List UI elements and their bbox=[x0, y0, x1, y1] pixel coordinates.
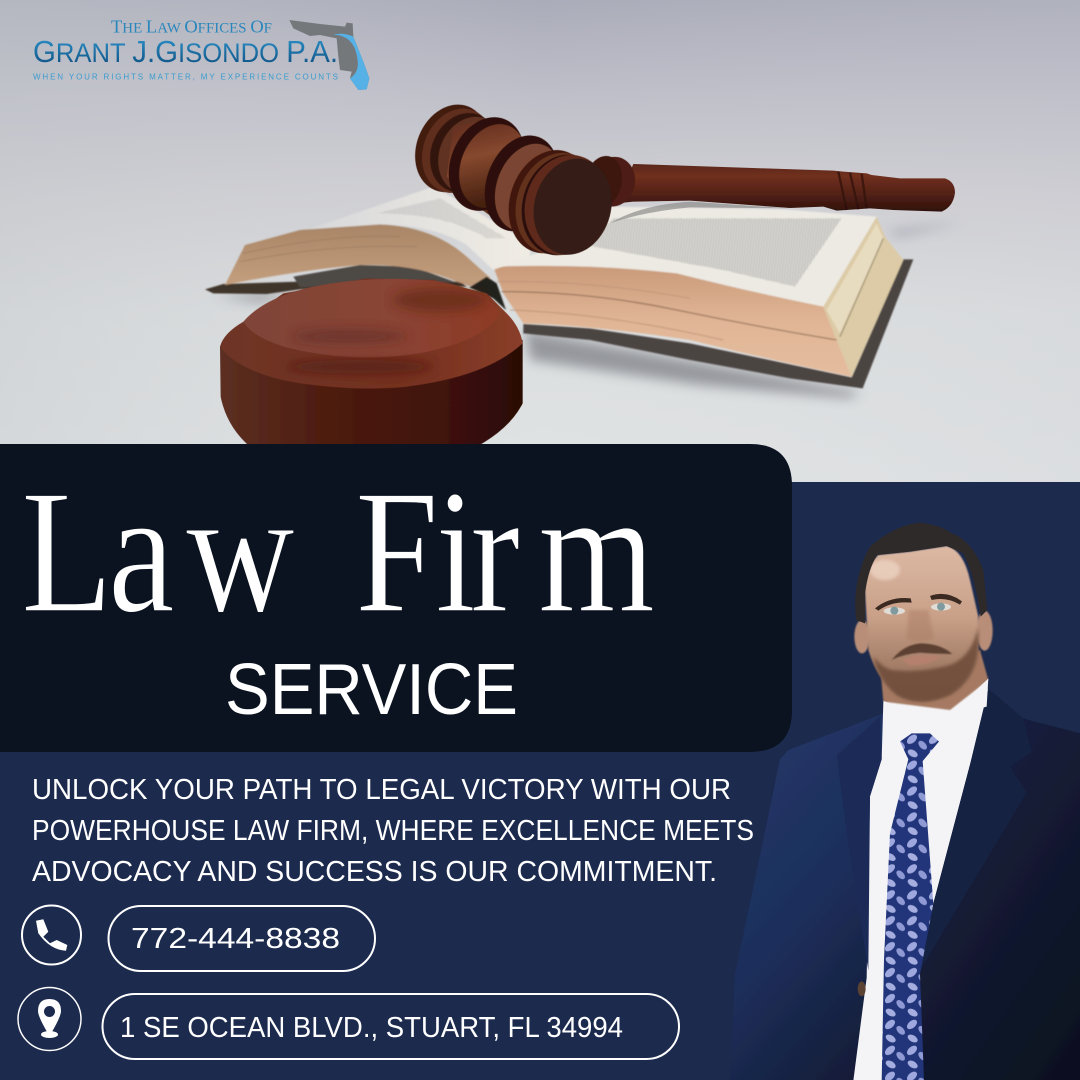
jacket button bbox=[858, 981, 866, 996]
wood mottling bbox=[287, 288, 487, 373]
description line 3: ADVOCACY AND SUCCESS IS OUR COMMITMENT. bbox=[32, 856, 717, 888]
shirt bbox=[853, 681, 989, 1080]
eyes and brows bbox=[875, 594, 962, 615]
left printed text bbox=[377, 198, 507, 238]
gavel face bbox=[523, 150, 622, 264]
description line 1: UNLOCK YOUR PATH TO LEGAL VICTORY WITH OUR bbox=[32, 774, 731, 806]
description line 2: POWERHOUSE LAW FIRM, WHERE EXCELLENCE MEETS bbox=[32, 815, 754, 847]
fore edge bbox=[823, 217, 903, 377]
spine notch bbox=[469, 277, 506, 310]
collar bbox=[587, 153, 640, 211]
book cover bbox=[523, 259, 913, 388]
left lapel bbox=[837, 717, 882, 970]
block top face bbox=[243, 279, 499, 357]
head bbox=[854, 523, 993, 723]
left underside shadow bbox=[293, 265, 457, 287]
panel background bbox=[0, 444, 792, 752]
pill: address: 1 SE OCEAN BLVD., STUART, FL 34994 bbox=[120, 1012, 623, 1044]
sound block bbox=[220, 278, 523, 447]
page surface bbox=[493, 207, 877, 307]
logo: Florida map bbox=[289, 20, 369, 90]
second ring bbox=[472, 125, 571, 242]
face bbox=[865, 546, 978, 702]
lips bbox=[902, 655, 941, 665]
subtitle: SERVICE: SERVICE bbox=[225, 650, 518, 730]
title: Law Firm: Law Firm bbox=[21, 454, 655, 650]
printed text bbox=[540, 218, 842, 287]
gavel head bbox=[402, 93, 640, 265]
pill: phone number: 772-444-8838 bbox=[131, 923, 340, 955]
hair bbox=[855, 523, 987, 623]
block rim bbox=[220, 278, 523, 389]
right jacket front bbox=[918, 689, 1080, 1080]
panel: title bbox=[0, 444, 792, 752]
left cover bbox=[205, 282, 467, 294]
left page surface bbox=[297, 187, 530, 270]
barrel bbox=[447, 118, 550, 230]
icon: phone bbox=[22, 906, 81, 964]
moustache bbox=[892, 643, 952, 660]
logo bbox=[33, 16, 369, 90]
logo: firm name: GRANT J.GISONDO P.A. bbox=[33, 34, 338, 69]
tie bbox=[882, 733, 939, 1080]
right lapel bbox=[920, 689, 1032, 970]
handle shadow on page bbox=[610, 202, 790, 223]
left page block bbox=[225, 224, 491, 286]
forehead highlight bbox=[870, 560, 900, 580]
jacket bbox=[730, 689, 1080, 1080]
suit and shirt bbox=[730, 681, 1080, 1080]
photo: gavel and open law book bbox=[0, 0, 1080, 482]
neck bbox=[880, 650, 988, 710]
nose shadow bbox=[906, 610, 934, 642]
table shadows bbox=[215, 222, 965, 398]
collar tips over neck bbox=[883, 678, 988, 723]
open book: left side bbox=[205, 187, 530, 310]
description text bbox=[32, 774, 754, 888]
gavel handle bbox=[610, 164, 955, 223]
open book: right side bbox=[493, 207, 913, 388]
icon: location pin bbox=[18, 988, 81, 1050]
pill: address bbox=[102, 994, 679, 1059]
ears bbox=[854, 611, 993, 653]
photo backdrop bbox=[0, 0, 1080, 482]
left rings bbox=[402, 93, 501, 203]
mid ring bbox=[435, 106, 538, 222]
portrait of attorney bbox=[730, 523, 1080, 1080]
logo: line one: THE LAW OFFICES OF bbox=[111, 16, 272, 36]
beard bbox=[873, 627, 978, 702]
block side bbox=[220, 340, 523, 447]
pill: phone number bbox=[108, 906, 375, 971]
logo: tagline: WHEN YOUR RIGHTS MATTER, MY EXPERIENCE COUNTS bbox=[33, 72, 338, 82]
front rings bbox=[496, 139, 604, 264]
page block bbox=[493, 266, 852, 377]
